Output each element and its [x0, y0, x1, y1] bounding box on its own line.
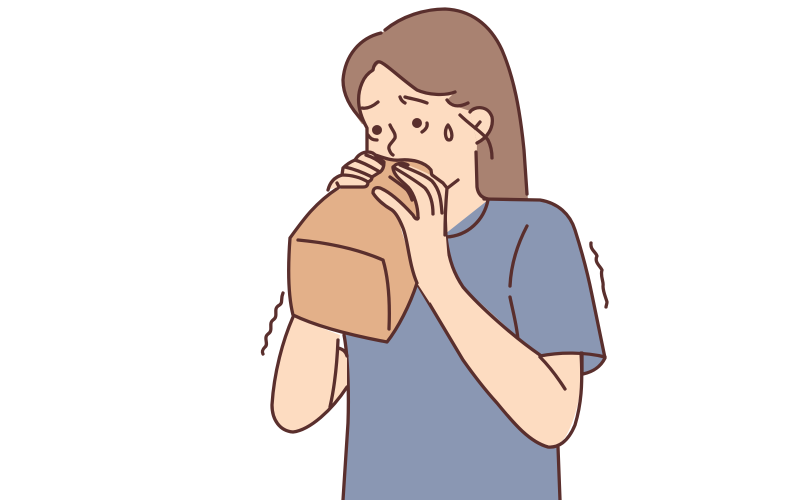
shake marks left	[262, 293, 283, 354]
front arm	[405, 185, 605, 447]
paper bag	[289, 155, 445, 342]
face and neck	[358, 62, 488, 238]
back hand fingers	[328, 151, 384, 190]
eyes, brows, nose, sweat drop	[362, 97, 452, 155]
front hand fingers	[373, 163, 448, 303]
back arm	[272, 317, 347, 432]
shake marks right	[591, 243, 607, 307]
hair	[343, 9, 528, 200]
hair wisp and ear	[447, 100, 492, 158]
t-shirt	[343, 199, 605, 500]
